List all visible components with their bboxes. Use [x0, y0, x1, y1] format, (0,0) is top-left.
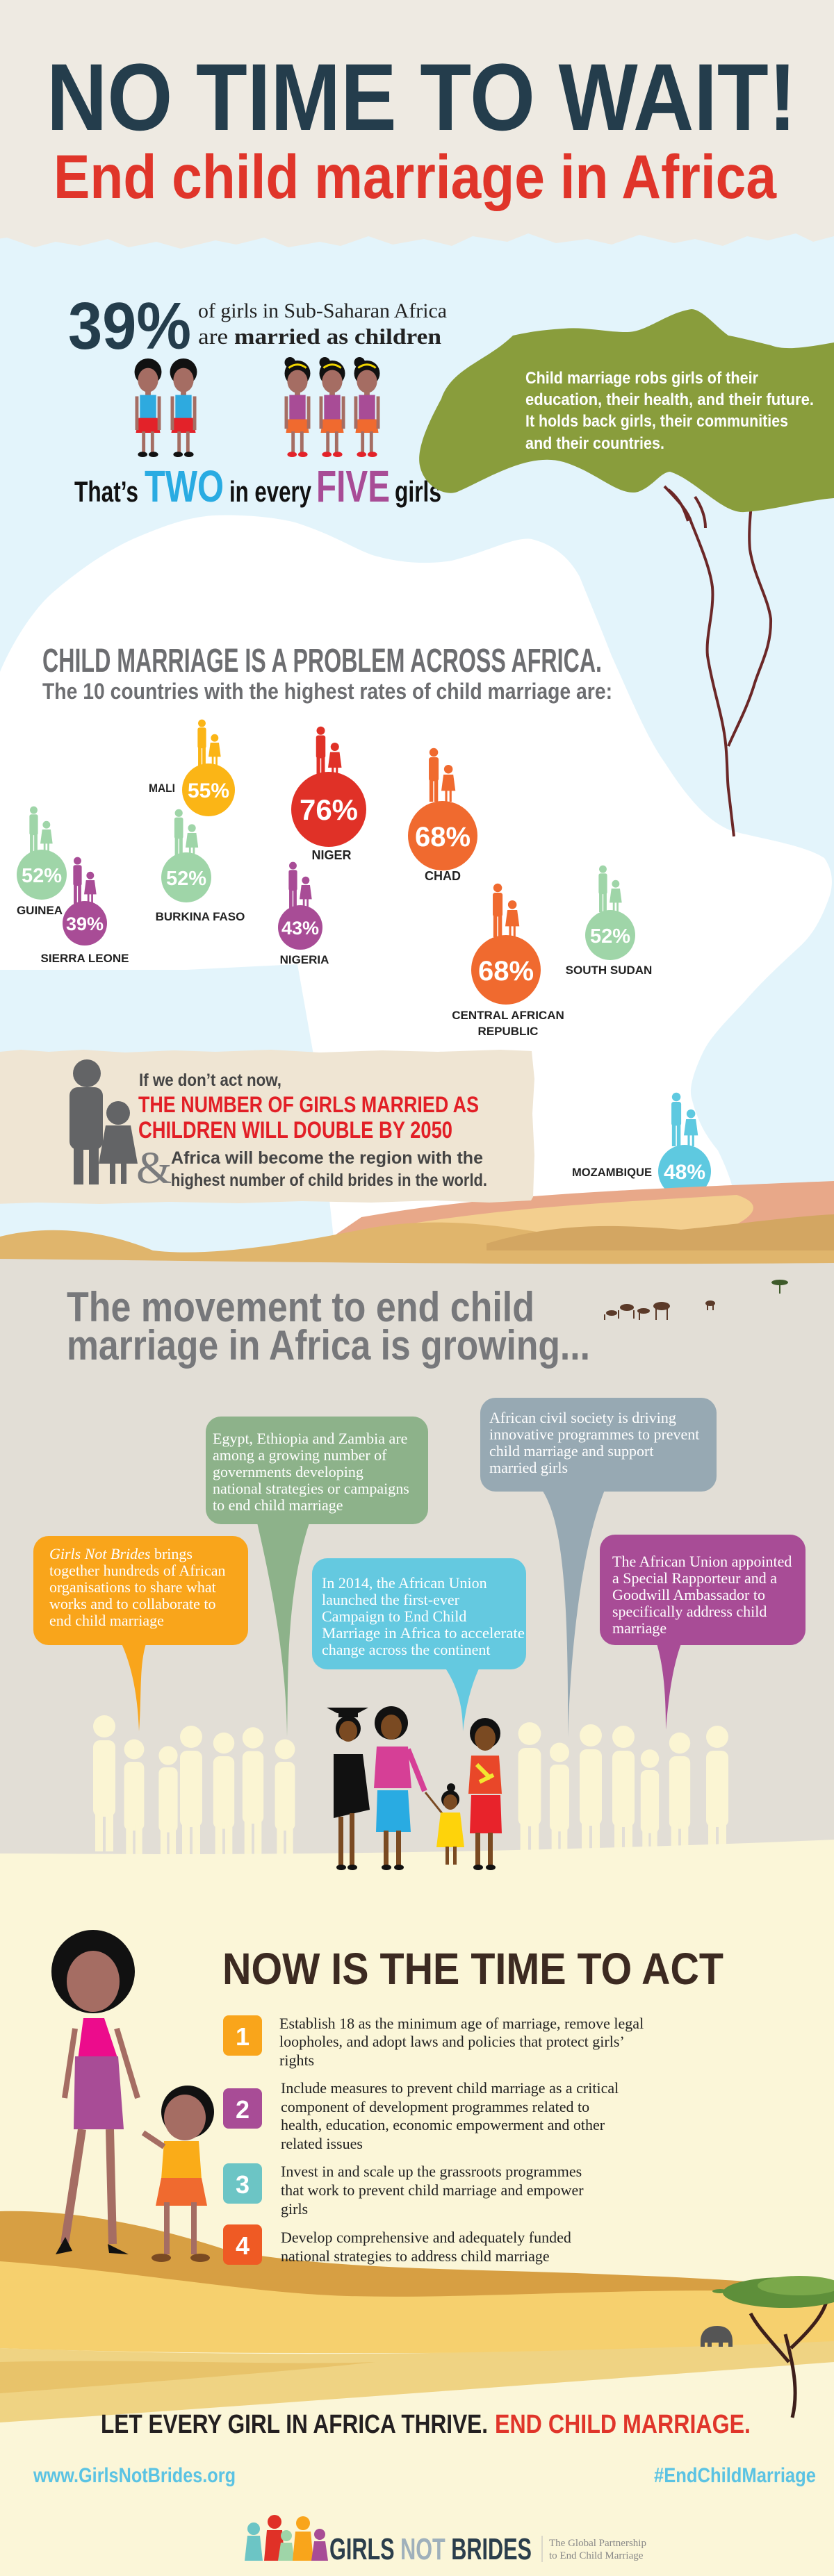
- bubble: governments: to end child marriage: [213, 1496, 343, 1514]
- bubble: special rapporteur: specifically address child: [612, 1603, 767, 1620]
- heading: child marriage across africa: The 10 countries with the highest rates of child marriage are:: [42, 679, 612, 704]
- box: if we don't act now: &: [136, 1143, 172, 1194]
- country: Burkina Faso: BURKINA FASO: [156, 910, 245, 923]
- icon: antelopes and tree: [605, 1280, 788, 1320]
- dunes: middle: [0, 1181, 834, 1271]
- box: if we don't act now: Africa will become the region with the: [171, 1148, 483, 1168]
- bubble: African Union campaign: [312, 1558, 526, 1731]
- box: if we don't act now: [0, 1050, 534, 1204]
- country: Mozambique: [572, 1093, 711, 1198]
- heading: movement: The movement to end child: [67, 1284, 534, 1330]
- text: two in every five: FIVE: [316, 461, 390, 511]
- bubble: governments: national strategies or campaigns: [213, 1480, 409, 1497]
- bubble: special rapporteur: [600, 1535, 806, 1730]
- heading: movement: marriage in Africa is growing...: [67, 1322, 590, 1369]
- action 3: 3: [236, 2170, 250, 2199]
- country: Sierra Leone: [41, 857, 129, 965]
- bubble: Girls Not Brides: [33, 1536, 248, 1731]
- action 2: Include measures to prevent child marriage as a critical: [281, 2079, 619, 2097]
- country: Guinea: 52%: [22, 865, 62, 887]
- tagline: LET EVERY GIRL IN AFRICA THRIVE.: [101, 2410, 488, 2439]
- icon: three girls: [285, 357, 379, 457]
- figure: mother and daughter: [51, 1930, 214, 2262]
- country: Guinea: [17, 807, 67, 917]
- action 1: rights: [279, 2051, 314, 2069]
- action 1: Establish 18 as the minimum age of marriage, remove legal: [279, 2015, 644, 2032]
- figure: woman in red: [468, 1718, 502, 1870]
- bubble: civil society: [480, 1398, 717, 1737]
- country: Central African Republic: [452, 884, 564, 1038]
- country: Chad: [408, 748, 477, 883]
- box: if we don't act now: highest number of child brides in the world.: [171, 1171, 487, 1190]
- country: Nigeria: 43%: [281, 918, 319, 939]
- website link: www.GirlsNotBrides.org: [33, 2464, 236, 2487]
- callout: green tree cloud: It holds back girls, their communities: [525, 412, 788, 431]
- action 3: that work to prevent child marriage and empower: [281, 2181, 584, 2199]
- bubble: Girls Not Brides: together hundreds of African: [49, 1562, 226, 1579]
- dunes: bottom: [0, 2211, 834, 2422]
- bubble: Girls Not Brides: end child marriage: [49, 1612, 164, 1629]
- icon: acacia tree and elephant: [701, 2276, 834, 2418]
- figure: woman in pink: [374, 1706, 425, 1870]
- country: Mozambique: MOZAMBIQUE: [572, 1166, 652, 1179]
- action 3: girls: [281, 2200, 308, 2218]
- text: two in every five: girls: [395, 475, 441, 508]
- heading: child marriage across africa: [42, 643, 612, 704]
- action 2: health, education, economic empowerment and other: [281, 2116, 605, 2133]
- bubble: Girls Not Brides: works and to collaborate to: [49, 1595, 215, 1612]
- text: two in every five: That’s: [74, 475, 138, 508]
- country: Mali: 55%: [188, 779, 229, 802]
- bubble: African Union campaign: In 2014, the African Union: [322, 1574, 487, 1592]
- country: Nigeria: [278, 862, 329, 966]
- bubble: civil society: married girls: [489, 1459, 568, 1476]
- bubble: Girls Not Brides: Girls Not Brides brings: [49, 1545, 193, 1562]
- country: Burkina Faso: 52%: [166, 868, 206, 890]
- action 2: [223, 2079, 619, 2152]
- text: two in every five: in every: [229, 475, 311, 508]
- background: header paper: [0, 0, 834, 251]
- country: South Sudan: 52%: [590, 925, 630, 948]
- action 4: Develop comprehensive and adequately funded: [281, 2229, 571, 2246]
- action 2: 2: [236, 2095, 250, 2124]
- text: two in every five: TWO: [145, 461, 224, 511]
- action 4: national strategies to address child marriage: [281, 2247, 550, 2265]
- box: if we don't act now: THE NUMBER OF GIRLS MARRIED AS: [138, 1092, 479, 1117]
- action 1: [223, 2015, 644, 2069]
- bubble: African Union campaign: Marriage in Africa to accelerate: [322, 1624, 525, 1642]
- bubble: special rapporteur: marriage: [612, 1619, 667, 1637]
- callout: green tree cloud: and their countries.: [525, 434, 664, 453]
- heading: now is the time to act: NOW IS THE TIME TO ACT: [222, 1944, 723, 1994]
- action 4: [223, 2224, 571, 2265]
- country: South Sudan: SOUTH SUDAN: [566, 964, 652, 977]
- country: Niger: [291, 727, 366, 862]
- country: Sierra Leone: 39%: [66, 914, 104, 934]
- country: Chad: 68%: [415, 822, 471, 852]
- action 1: loopholes, and adopt laws and policies that protect girls’: [279, 2033, 625, 2050]
- bubble: African Union campaign: change across the continent: [322, 1641, 491, 1658]
- bubble: governments: among a growing number of: [213, 1446, 387, 1464]
- tree trunks: [664, 470, 771, 836]
- action 3: [223, 2163, 584, 2218]
- action 4: 4: [236, 2231, 250, 2260]
- bubble: civil society: child marriage and support: [489, 1442, 653, 1460]
- action 2: component of development programmes related to: [281, 2098, 589, 2115]
- icon: two girls: [135, 358, 197, 457]
- stat: 39%: are married as children: [198, 324, 441, 349]
- bubble: special rapporteur: a Special Rapporteur and a: [612, 1569, 777, 1587]
- callout: green tree cloud: Child marriage robs girls of their: [525, 369, 758, 388]
- bubble: African Union campaign: launched the first-ever: [322, 1591, 460, 1608]
- stat: 39%: 39%: [68, 289, 191, 363]
- country: Mozambique: 48%: [664, 1161, 705, 1184]
- stat: 39%: [68, 289, 447, 363]
- bubble: African Union campaign: Campaign to End Child: [322, 1608, 466, 1625]
- country: Niger: 76%: [300, 793, 358, 826]
- action 3: Invest in and scale up the grassroots programmes: [281, 2163, 582, 2180]
- bubble: civil society: African civil society is driving: [489, 1409, 676, 1426]
- country: South Sudan: [566, 866, 652, 977]
- background: africa map: [0, 515, 832, 1250]
- logo: Girls Not Brides: to End Child Marriage: [549, 2550, 644, 2561]
- text: two in every five: [74, 461, 441, 511]
- action 1: 1: [236, 2022, 250, 2051]
- stat: 39%: of girls in Sub-Saharan Africa: [198, 299, 447, 322]
- callout: green tree cloud: education, their health, and their future.: [525, 390, 814, 409]
- box: if we don't act now: CHILDREN WILL DOUBLE BY 2050: [138, 1117, 452, 1143]
- country: Guinea: GUINEA: [17, 904, 63, 917]
- country: Central African Republic: 68%: [478, 956, 534, 986]
- bubble: governments: governments developing: [213, 1463, 363, 1480]
- country: Mali: MALI: [149, 782, 175, 795]
- figure: little girl: [425, 1783, 464, 1865]
- country: Sierra Leone: SIERRA LEONE: [41, 952, 129, 965]
- crowd silhouettes: [93, 1715, 728, 1862]
- logo: Girls Not Brides: GIRLS NOT BRIDES: [329, 2532, 532, 2566]
- bubble: Girls Not Brides: organisations to share what: [49, 1578, 216, 1596]
- background: movement section: [0, 1259, 834, 1854]
- heading: movement: [67, 1284, 590, 1369]
- country: Niger: NIGER: [311, 848, 352, 862]
- bubble: governments: [206, 1417, 428, 1737]
- logo: Girls Not Brides: [245, 2515, 646, 2566]
- callout: green tree cloud: [419, 309, 834, 512]
- bubble: special rapporteur: The African Union appointed: [612, 1553, 792, 1570]
- box: if we don't act now: If we don’t act now,: [139, 1071, 281, 1090]
- background: sky: [0, 208, 834, 1264]
- country: Burkina Faso: [156, 809, 245, 923]
- bubble: special rapporteur: Goodwill Ambassador to: [612, 1586, 765, 1603]
- country: Central African Republic: CENTRAL AFRICAN: [452, 1009, 564, 1022]
- country: Nigeria: NIGERIA: [280, 953, 329, 966]
- icon: adult and child silhouettes: [70, 1059, 138, 1184]
- background: lower cream ground: [0, 1840, 834, 2576]
- country: Chad: CHAD: [425, 869, 461, 883]
- figure: graduate: [327, 1708, 370, 1870]
- logo: Girls Not Brides: The Global Partnership: [549, 2538, 646, 2549]
- country: Central African Republic: REPUBLIC: [478, 1025, 538, 1038]
- figures: family group: [327, 1706, 502, 1870]
- country: Mali: [149, 720, 235, 816]
- action 2: related issues: [281, 2135, 363, 2152]
- bubble: civil society: innovative programmes to prevent: [489, 1426, 699, 1443]
- tagline: END CHILD MARRIAGE.: [495, 2410, 751, 2439]
- bubble: governments: Egypt, Ethiopia and Zambia are: [213, 1430, 407, 1447]
